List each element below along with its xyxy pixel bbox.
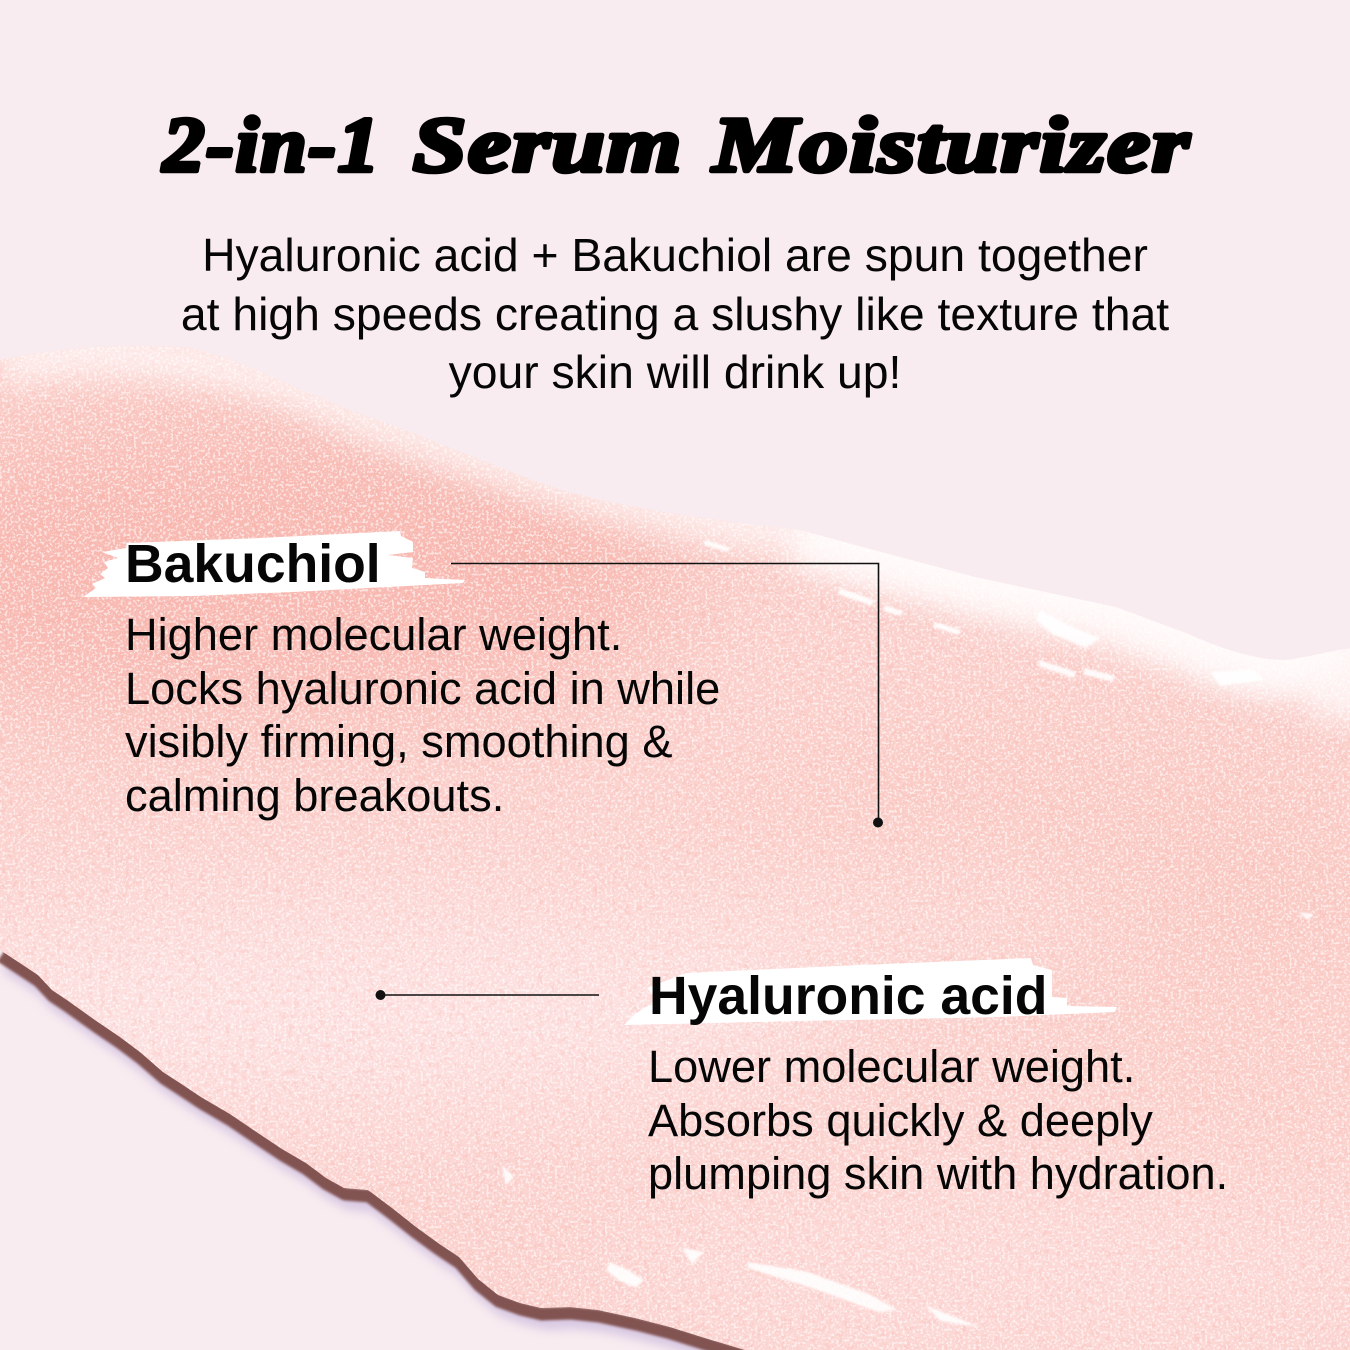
heading: Bakuchiol: Bakuchiol (125, 535, 381, 594)
serum smear body (0, 346, 1350, 1350)
glossy white upper edge (0, 353, 1350, 660)
title: Serum (413, 101, 683, 188)
description: Hyaluronic acid (648, 1041, 1228, 1199)
description: Bakuchiol: Higher molecular weight. (125, 609, 622, 660)
callout: Hyaluronic acid (376, 958, 1228, 1199)
title: Moisturizer (711, 101, 1191, 188)
description: Bakuchiol (125, 609, 720, 821)
cast shadow under lower edge (1, 956, 751, 1350)
intro paragraph (181, 229, 1169, 398)
heading highlight stroke: Bakuchiol (83, 531, 465, 597)
serum texture swatch (0, 346, 1350, 1350)
leader line with dot (376, 990, 599, 1000)
heading: Hyaluronic acid: Hyaluronic acid (649, 967, 1047, 1026)
description: Bakuchiol: visibly firming, smoothing & (125, 716, 672, 767)
white flecks (502, 540, 1314, 1327)
title: 2-in-1 (162, 101, 381, 188)
intro paragraph: Hyaluronic acid + Bakuchiol are spun together (202, 229, 1148, 281)
description: Bakuchiol: Locks hyaluronic acid in while (125, 663, 720, 714)
leader line with dot (451, 562, 883, 828)
title (160, 101, 1193, 188)
intro paragraph: at high speeds creating a slushy like texture that (181, 288, 1169, 340)
description: Bakuchiol: calming breakouts. (125, 770, 504, 821)
heading highlight stroke: Hyaluronic acid (624, 958, 1117, 1025)
description: Hyaluronic acid: Lower molecular weight. (648, 1041, 1135, 1092)
description: Hyaluronic acid: plumping skin with hydration. (648, 1148, 1228, 1199)
callout: Bakuchiol (83, 531, 883, 828)
description: Hyaluronic acid: Absorbs quickly & deeply (648, 1095, 1153, 1146)
intro paragraph: your skin will drink up! (449, 346, 901, 398)
